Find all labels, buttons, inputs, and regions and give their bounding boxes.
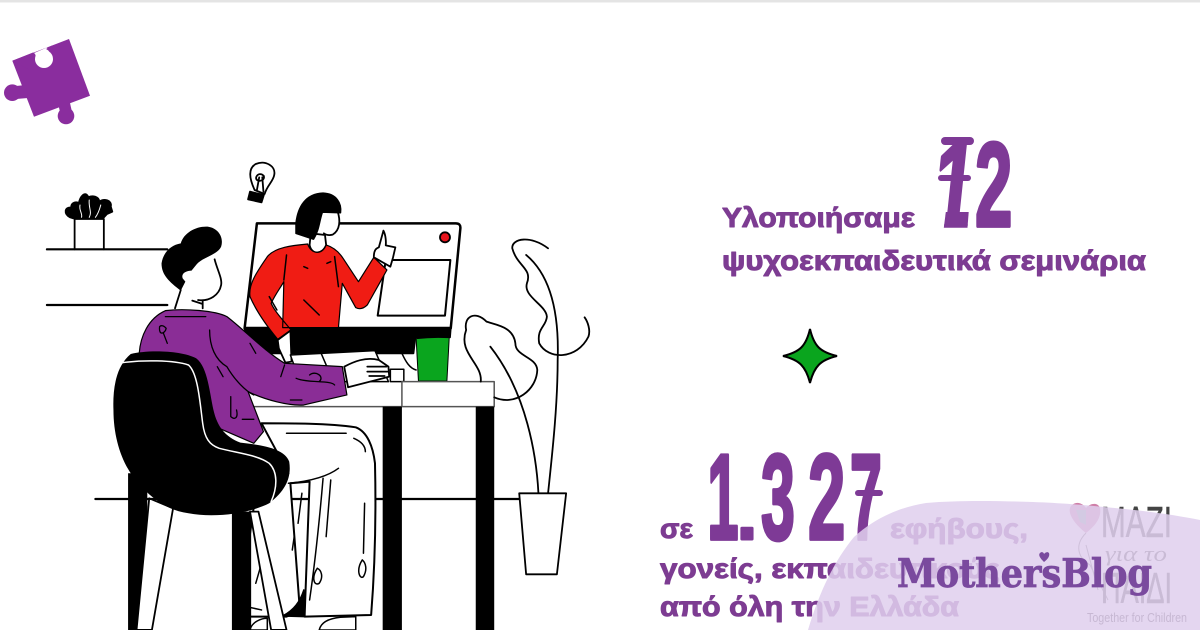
icon: green four-point star (783, 329, 837, 383)
woman in red on screen (250, 193, 395, 363)
lower hand (278, 331, 292, 363)
stat number: 12: 1 (927, 118, 982, 252)
hair (296, 193, 341, 239)
stat text: number of participants: γονείς, εκπαιδευτικούς (660, 553, 1000, 584)
man's head (162, 227, 222, 308)
slide box on screen (378, 260, 450, 316)
stat text: number of participants: από όλη την Ελλάδα (660, 591, 959, 622)
floor line (95, 498, 519, 500)
icon: purple puzzle piece (4, 39, 90, 124)
green mug (416, 337, 449, 381)
stat number: 1.327: 2 (808, 429, 845, 565)
stat text: number of participants: εφήβους, (890, 513, 1028, 544)
monitor (245, 223, 460, 353)
plant in pot (464, 240, 589, 574)
stat number: 12: 2 (975, 117, 1012, 252)
paper on desk (290, 351, 416, 382)
logo: Mazi gia to Paidi: για το (1105, 541, 1167, 566)
man's hand (344, 359, 389, 387)
pointing hand (374, 231, 395, 267)
logo: MothersBlog: MothersBlog (897, 551, 1152, 597)
stat number: 1.327 (707, 429, 882, 566)
illustration: online session at desk (47, 163, 589, 630)
stat number: 1.327: 3 (761, 430, 795, 566)
man's trousers (238, 423, 375, 617)
stat number: 1.327: 1 (707, 430, 739, 566)
stat text: number of participants (660, 429, 1028, 622)
stat number: 12 (938, 137, 1011, 228)
heart (1070, 503, 1100, 533)
face (317, 210, 339, 235)
shelves (47, 249, 167, 305)
stat text: number of participants: σε (660, 513, 693, 544)
icon: light bulb (248, 163, 274, 202)
icon: potted plant on shelf (66, 194, 112, 249)
feet (250, 617, 356, 630)
stat number: 1.327: 7 (850, 430, 882, 566)
stat: seminars heading line: Υλοποιήσαμε (722, 202, 915, 233)
black armchair (113, 351, 290, 630)
man's purple sweater (139, 310, 389, 443)
red camera dot (440, 232, 450, 242)
watermark panel: lilac overlay (808, 501, 1200, 630)
stat number: 1.327: . (737, 475, 757, 555)
text: psychoeducational seminars: ψυχοεκπαιδευτικά σεμινάρια (722, 245, 1146, 276)
desk (250, 382, 494, 630)
logo: Mazi gia to Paidi (1070, 498, 1172, 613)
